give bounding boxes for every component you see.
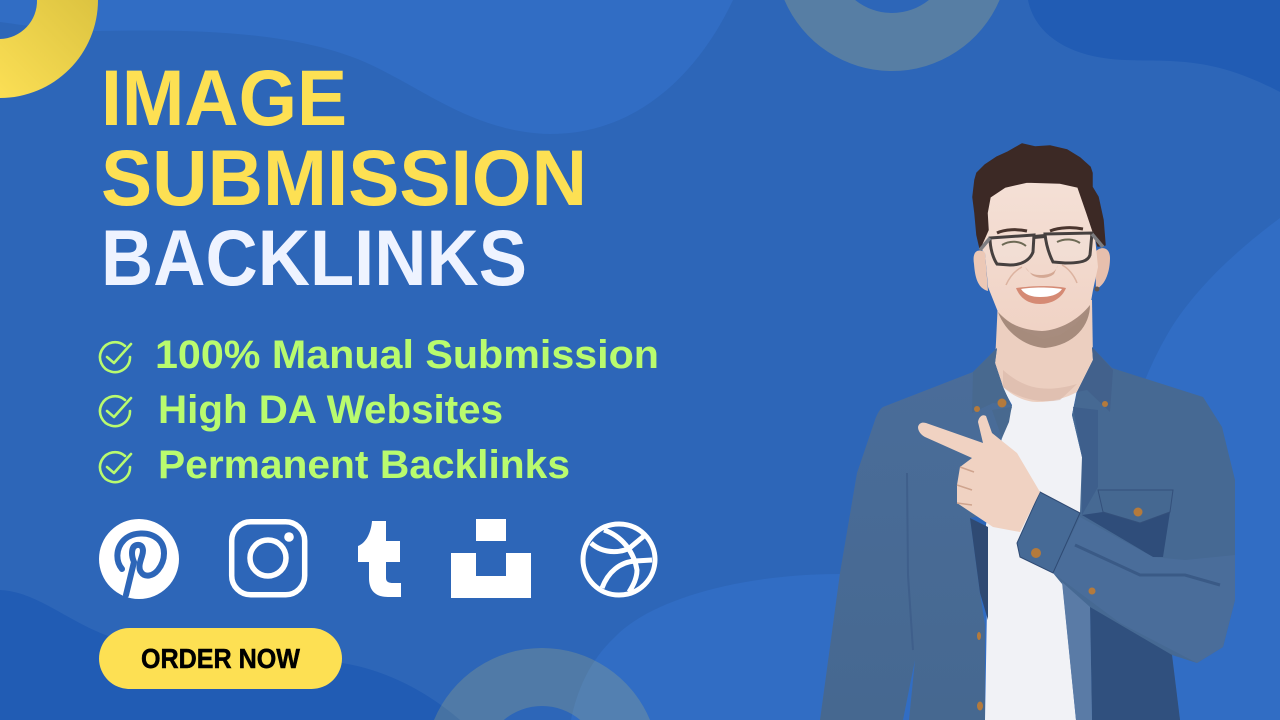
cuff: [1017, 492, 1080, 573]
glasses: [980, 233, 1103, 265]
arm line: [907, 473, 913, 650]
pocket: [1082, 490, 1173, 557]
right ear: [1095, 248, 1110, 289]
left ear: [974, 250, 988, 291]
t-shirt: [985, 383, 1082, 720]
icon: instagram: [232, 522, 305, 595]
icon: check 2: [100, 396, 131, 426]
eyes: [1002, 239, 1080, 246]
head: [973, 144, 1110, 348]
background blob: top light: [0, 0, 733, 134]
mouth: [1016, 286, 1066, 304]
icon: pinterest: [99, 519, 179, 599]
social icons: [99, 519, 655, 599]
teeth: [1021, 288, 1062, 297]
feature list: [100, 333, 659, 487]
background blob: bottom left dark: [0, 590, 460, 720]
hand: [918, 415, 1040, 532]
sleeve fold: [1075, 545, 1220, 585]
lower right placket: [1062, 582, 1092, 720]
pocket flap: [1098, 490, 1173, 523]
icon: unsplash: [451, 519, 531, 598]
icon: check 1: [100, 342, 131, 372]
finger lines: [957, 467, 974, 505]
title line: backlinks: BACKLINKS: [101, 213, 527, 302]
shirt left panel: [820, 348, 1012, 720]
beard: [998, 305, 1090, 348]
face: [980, 182, 1098, 339]
hair: [973, 144, 1105, 248]
feature: manual submission: 100% Manual Submission: [155, 333, 659, 377]
button: order now: [99, 628, 342, 689]
icon: dribbble: [583, 524, 655, 595]
title line: submission: SUBMISSION: [101, 133, 587, 222]
person pointing: [820, 144, 1235, 720]
earring: [1094, 286, 1100, 292]
decorative bottom ring: [434, 648, 650, 720]
sleeve: [1053, 517, 1235, 663]
right collar: [1077, 347, 1113, 412]
smile lines: [1006, 265, 1077, 285]
icon: check 3: [100, 452, 131, 482]
upper right placket: [1073, 407, 1098, 515]
center dark panel: [1090, 607, 1180, 720]
left placket shadow: [970, 518, 988, 620]
neck: [995, 300, 1093, 402]
icon: tumblr: [358, 521, 401, 597]
background blob: bottom right light: [571, 218, 1280, 720]
shirt buttons: [974, 398, 1142, 710]
shirt right panel: [1053, 347, 1235, 720]
dark area under flap: [1082, 512, 1170, 557]
neck shadow: [1003, 370, 1077, 401]
left collar: [972, 348, 1012, 438]
title line: image: IMAGE: [101, 53, 347, 142]
eyebrows: [997, 228, 1083, 233]
feature: high DA websites: High DA Websites: [158, 388, 503, 432]
background blob: top right dark: [1028, 0, 1280, 92]
decorative yellow ring: [0, 0, 98, 98]
feature: permanent backlinks: Permanent Backlinks: [158, 443, 570, 487]
title: [101, 53, 587, 302]
nose shadow: [1025, 265, 1058, 278]
decorative top ring: [784, 0, 1000, 71]
button label: ORDER NOW: [141, 643, 300, 674]
